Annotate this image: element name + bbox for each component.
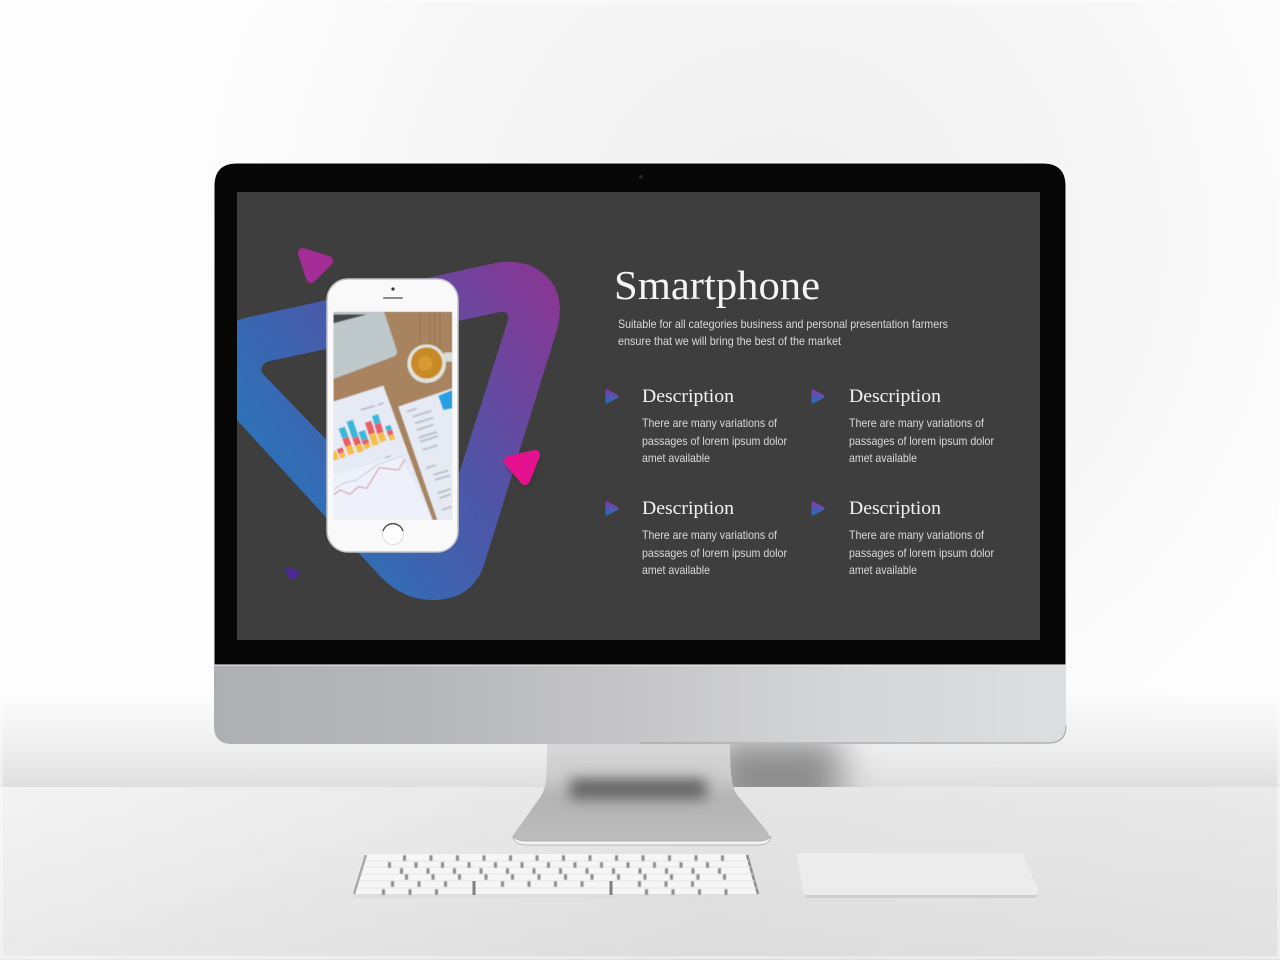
body: There are many variations of bbox=[642, 528, 778, 542]
item: description bottom right bbox=[813, 499, 994, 577]
trackpad bbox=[797, 853, 1038, 898]
body: passages of lorem ipsum dolor bbox=[849, 434, 994, 448]
intro text bbox=[618, 317, 948, 348]
body: amet available bbox=[849, 563, 917, 577]
report paper with charts bbox=[333, 386, 433, 520]
monitor bezel bbox=[214, 163, 1066, 665]
body: amet available bbox=[849, 451, 917, 465]
body bbox=[642, 416, 787, 465]
item: description top right bbox=[813, 387, 994, 465]
marker bbox=[813, 503, 823, 514]
intro text: ensure that we will bring the best of the market bbox=[618, 334, 842, 348]
body: passages of lorem ipsum dolor bbox=[849, 546, 994, 560]
coffee cup bbox=[407, 344, 453, 383]
bar chart bbox=[333, 415, 393, 460]
phone screen photo bbox=[333, 312, 453, 520]
heading: Description bbox=[642, 387, 734, 407]
smartphone bbox=[327, 279, 458, 552]
icon: purple triangle bbox=[303, 253, 328, 278]
screen panel bbox=[237, 192, 1040, 640]
phone body bbox=[327, 279, 458, 552]
monitor chin bbox=[214, 665, 1066, 744]
line chart bbox=[333, 459, 405, 495]
intro text: Suitable for all categories business and personal presentation farmers bbox=[618, 317, 948, 331]
monitor stand bbox=[513, 744, 771, 845]
heading: Description bbox=[849, 387, 941, 407]
triangle ring graphic bbox=[215, 262, 560, 600]
body bbox=[849, 416, 994, 465]
body: There are many variations of bbox=[849, 528, 985, 542]
phone earpiece bbox=[383, 287, 403, 299]
title: Smartphone bbox=[614, 262, 820, 308]
marker bbox=[607, 391, 617, 402]
phone home button bbox=[382, 524, 404, 544]
heading: Description bbox=[642, 499, 734, 519]
icon: small violet triangle bbox=[288, 570, 296, 577]
monitor bbox=[214, 163, 1066, 744]
heading: Description bbox=[849, 499, 941, 519]
item: description top left bbox=[607, 387, 787, 465]
item: description bottom left bbox=[607, 499, 787, 577]
body: amet available bbox=[642, 563, 710, 577]
keyboard bbox=[353, 854, 759, 898]
icon: pink triangle bbox=[509, 455, 537, 484]
body: passages of lorem ipsum dolor bbox=[642, 434, 787, 448]
body: There are many variations of bbox=[642, 416, 778, 430]
camera bbox=[639, 175, 643, 179]
body: amet available bbox=[642, 451, 710, 465]
body: passages of lorem ipsum dolor bbox=[642, 546, 787, 560]
laptop bbox=[333, 312, 397, 379]
body bbox=[642, 528, 787, 577]
body bbox=[849, 528, 994, 577]
resume paper bbox=[398, 388, 452, 520]
body: There are many variations of bbox=[849, 416, 985, 430]
marker bbox=[607, 503, 617, 514]
marker bbox=[813, 391, 823, 402]
